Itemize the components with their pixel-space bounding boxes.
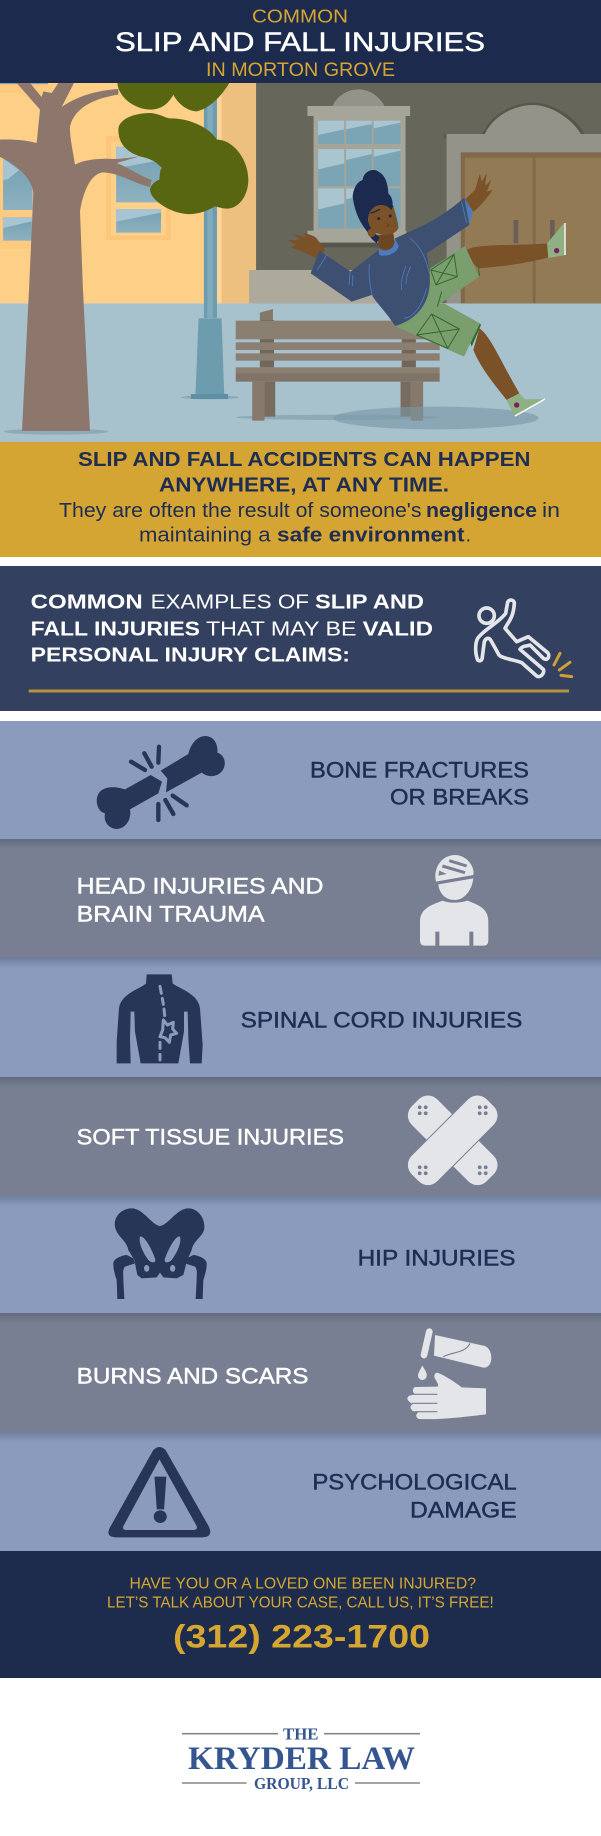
icon: chemical burn on hand — [407, 1332, 491, 1419]
label: SOFT TISSUE INJURIES — [77, 1125, 344, 1150]
icon: crossed bandages — [402, 1090, 503, 1191]
label: OR BREAKS — [390, 785, 529, 810]
heading line two: FALL INJURIES — [31, 618, 200, 641]
call to action text: HAVE YOU OR A LOVED ONE BEEN INJURED? — [130, 1575, 476, 1592]
icon: warning triangle — [108, 1447, 210, 1537]
header line: location: IN MORTON GROVE — [206, 60, 395, 81]
row: soft tissue — [0, 1077, 601, 1196]
logo: The Kryder Law Group: KRYDER LAW — [188, 1741, 415, 1777]
heading line two: VALID — [363, 618, 433, 641]
body text line one: They are often the result of someone's — [59, 500, 422, 522]
label: HIP INJURIES — [358, 1246, 516, 1271]
body text line one: negligence — [426, 500, 537, 522]
lamp post — [181, 83, 239, 399]
eyes and ear — [368, 205, 393, 237]
body text line two: safe environment — [277, 525, 465, 547]
label: PSYCHOLOGICAL — [312, 1470, 517, 1495]
row: head injuries — [0, 839, 601, 958]
gold panel: intro statement — [0, 442, 601, 557]
call to action text: LET’S TALK ABOUT YOUR CASE, CALL US, IT’S FREE! — [107, 1594, 494, 1611]
row: hip injuries — [0, 1196, 601, 1313]
shoes — [507, 223, 566, 417]
woman falling — [287, 170, 566, 417]
logo: The Kryder Law Group: GROUP, LLC — [254, 1774, 349, 1793]
heading line one — [31, 591, 424, 614]
navy panel: common examples — [0, 566, 601, 711]
label: BRAIN TRAUMA — [77, 902, 265, 927]
heading line one: EXAMPLES OF — [151, 591, 309, 614]
logo: The Kryder Law Group: THE — [283, 1724, 318, 1743]
call to action text — [107, 1575, 494, 1611]
body text line one — [59, 500, 560, 522]
legs — [467, 243, 548, 400]
row: spinal cord — [0, 958, 601, 1077]
label: BONE FRACTURES — [310, 758, 529, 783]
label: BURNS AND SCARS — [77, 1364, 308, 1389]
row: burns and scars — [0, 1313, 601, 1432]
icon: broken bone — [97, 736, 225, 829]
left window — [0, 83, 52, 249]
row: bone fractures — [0, 721, 601, 839]
body text line one: in — [542, 500, 560, 522]
illustration: woman slipping near bench — [0, 83, 601, 442]
icon: spine — [117, 974, 203, 1063]
footer call to action — [0, 1551, 601, 1678]
header line: common: COMMON — [252, 6, 348, 27]
bold statement line two: ANYWHERE, AT ANY TIME. — [159, 475, 449, 497]
building window — [307, 89, 410, 247]
row: psychological damage — [0, 1432, 601, 1551]
body text line two: . — [466, 525, 471, 547]
heading line three: PERSONAL INJURY CLAIMS: — [31, 644, 350, 667]
bench — [236, 309, 440, 421]
bold statement: SLIP AND FALL ACCIDENTS CAN HAPPEN — [78, 449, 530, 471]
header panel — [0, 0, 601, 83]
label: HEAD INJURIES AND — [77, 873, 324, 898]
label — [77, 873, 324, 927]
person shadow — [333, 407, 539, 429]
heading line one: SLIP AND — [315, 591, 424, 614]
heading line two: THAT MAY BE — [206, 618, 356, 641]
phone number: (312) 223-1700 — [173, 1618, 430, 1654]
doorway — [444, 103, 601, 303]
logo: The Kryder Law Group — [182, 1724, 420, 1793]
label: SPINAL CORD INJURIES — [241, 1008, 522, 1033]
icon: falling figure — [476, 600, 572, 677]
low wall — [249, 270, 383, 303]
heading line one: COMMON — [31, 591, 143, 614]
hair — [353, 170, 393, 243]
body text line two: maintaining a — [139, 525, 271, 547]
sweater — [311, 198, 473, 326]
label: DAMAGE — [410, 1498, 517, 1523]
neck and collar — [377, 233, 399, 256]
icon: bandaged head — [420, 855, 488, 946]
tree and foliage — [0, 83, 248, 431]
shorts — [395, 246, 481, 357]
title: SLIP AND FALL INJURIES — [115, 27, 485, 57]
icon: pelvis — [113, 1208, 207, 1299]
label — [312, 1470, 517, 1523]
label — [310, 758, 529, 810]
face — [368, 202, 398, 234]
middle yellow window — [106, 136, 171, 240]
body text line two — [139, 525, 471, 547]
hands — [287, 173, 493, 260]
heading line two — [31, 618, 433, 641]
shadows — [4, 415, 439, 435]
